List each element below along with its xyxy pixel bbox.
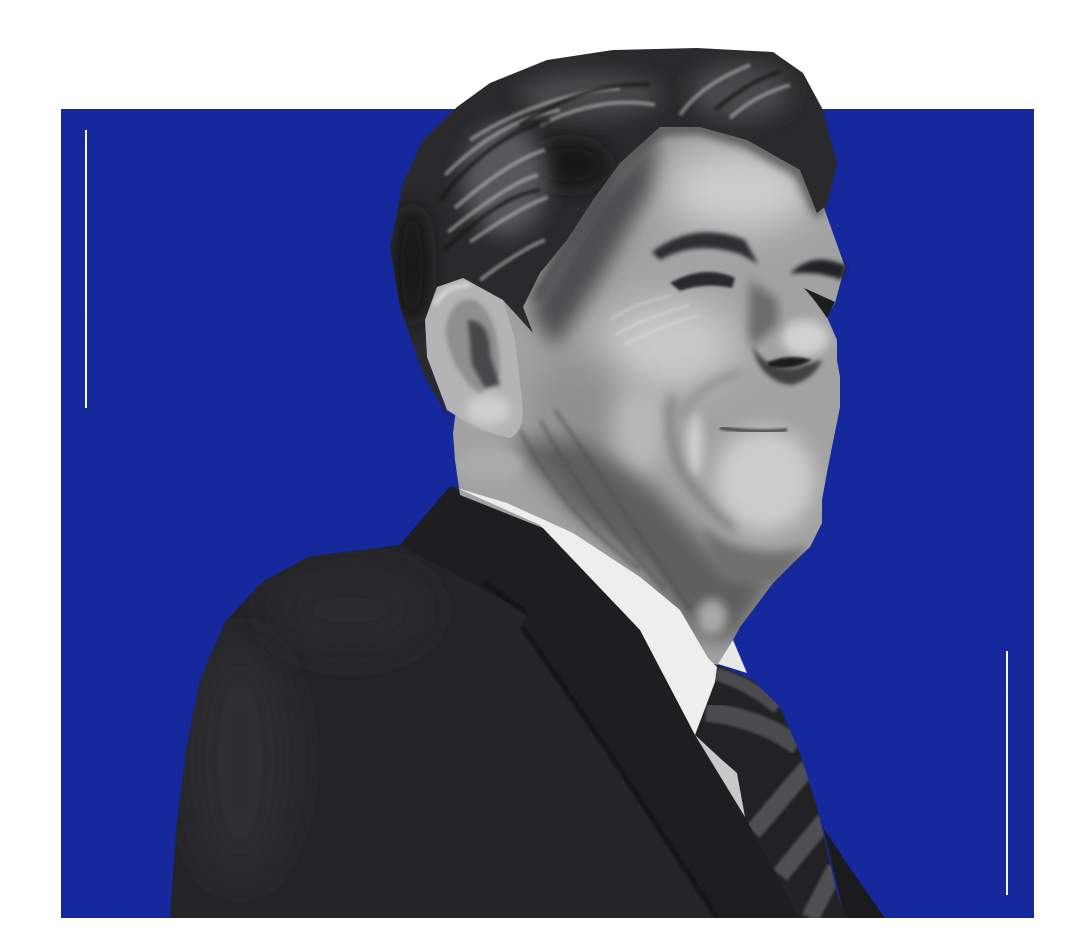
hairline soft shadow <box>535 128 820 300</box>
shirt below tie knot <box>695 735 745 817</box>
wrinkles <box>610 296 700 345</box>
nose light <box>781 320 829 356</box>
lapel <box>400 486 800 918</box>
temple shadow <box>530 130 660 350</box>
ear <box>425 278 523 438</box>
hair <box>390 48 837 430</box>
Adam's apple <box>697 599 727 635</box>
head and neck <box>453 115 847 665</box>
lapel seam <box>522 627 717 918</box>
mouth <box>720 428 787 431</box>
blue background panel <box>61 109 1034 918</box>
jacket sheen <box>184 660 274 854</box>
eyebrows <box>652 232 847 280</box>
upper cheek light <box>600 300 740 390</box>
hair highlights <box>445 65 790 280</box>
white line: bottom right <box>1006 651 1008 895</box>
nose shadows <box>748 280 822 385</box>
lower cheek <box>530 352 625 444</box>
chin under-shadow <box>700 525 810 585</box>
neck light left <box>456 450 524 476</box>
necktie <box>696 664 845 918</box>
hair tone <box>463 125 547 235</box>
neck folds <box>520 410 690 610</box>
neck shadow <box>510 440 775 640</box>
shirt collar <box>457 488 747 735</box>
forehead light <box>665 150 815 230</box>
eyes <box>670 272 835 318</box>
nasolabial fold <box>670 395 735 530</box>
suit jacket <box>170 486 885 918</box>
white line: top left <box>85 130 87 408</box>
mouth and jaw light <box>715 428 815 532</box>
hair dark zones <box>530 141 610 189</box>
